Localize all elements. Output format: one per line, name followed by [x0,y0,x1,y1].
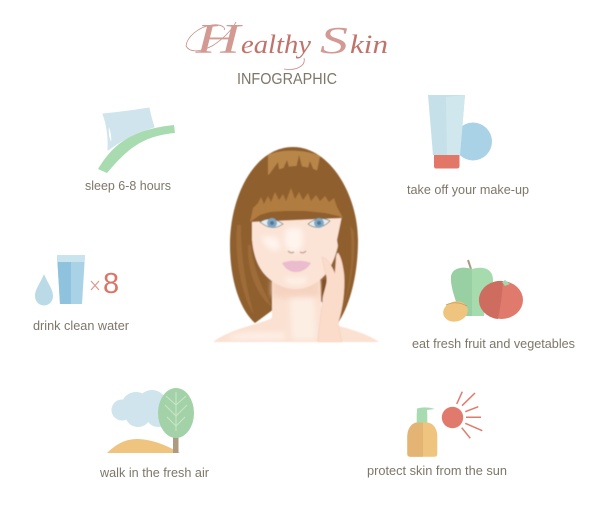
hair back [230,147,358,323]
peach crease [446,303,467,306]
label: drink clean water [33,319,129,333]
title: kin [350,30,388,59]
icon: peach [441,299,470,324]
hair between neck and hand [322,278,333,318]
icon: cotton pad [454,122,492,160]
fringe highlights [250,188,343,222]
right side hair lock [337,216,346,253]
icon: pillow [103,108,154,150]
pillow fold [109,127,111,142]
icon: bottle [407,422,437,457]
icon: apple stem [468,260,471,269]
glass shaded half [57,255,71,304]
tree veins [165,392,187,431]
fringe [250,166,343,222]
sleep item [85,108,175,193]
label: take off your make-up [407,183,529,197]
chest highlight [228,332,285,340]
pump neck [417,413,427,422]
label: protect skin from the sun [367,464,507,478]
title: H [195,17,244,63]
sun protection item [367,392,507,478]
neck shadow [272,280,320,299]
face [252,216,342,289]
hair sheen on crown [268,151,320,182]
icon: tube [428,95,465,155]
bottle shaded half [407,422,423,457]
eyes [260,218,330,228]
label: eat fresh fruit and vegetables [412,337,575,351]
icon: blanket [98,125,175,173]
nose [288,251,306,253]
icon: glass [57,255,85,304]
fruit item [412,260,575,351]
number eight: 8 [103,268,119,300]
sun rays [457,392,482,438]
fresh air item [99,388,209,480]
icon: pump top [417,407,435,414]
icon: cloud [112,390,170,427]
apple shaded half [451,268,472,316]
tube cap [434,155,460,168]
make-up item [407,95,529,197]
icon: water drop [35,274,53,306]
tube light side [446,95,465,155]
tomato shaded half [479,281,503,319]
multiply sign [91,281,99,290]
subtitle: INFOGRAPHIC [237,71,337,88]
portrait: woman with healthy skin [213,147,379,342]
icon: tree trunk [173,431,178,453]
label: walk in the fresh air [99,466,209,480]
title: ealthy [241,30,312,59]
neck highlight [290,298,316,340]
shoulders and neck [213,275,379,342]
glass rim [57,255,85,262]
face highlights [262,228,306,284]
icon: hill [107,439,180,453]
hand [318,253,344,342]
hair strands [236,225,354,315]
icon: tree crown [158,388,194,438]
lips [282,261,311,272]
icon: apple [451,268,493,316]
title: S [320,20,348,62]
title [186,17,388,69]
water item [33,255,129,333]
icon: tomato [480,281,523,319]
icon: sun [442,407,463,428]
tomato leaf [502,280,510,286]
label: sleep 6-8 hours [85,179,171,193]
